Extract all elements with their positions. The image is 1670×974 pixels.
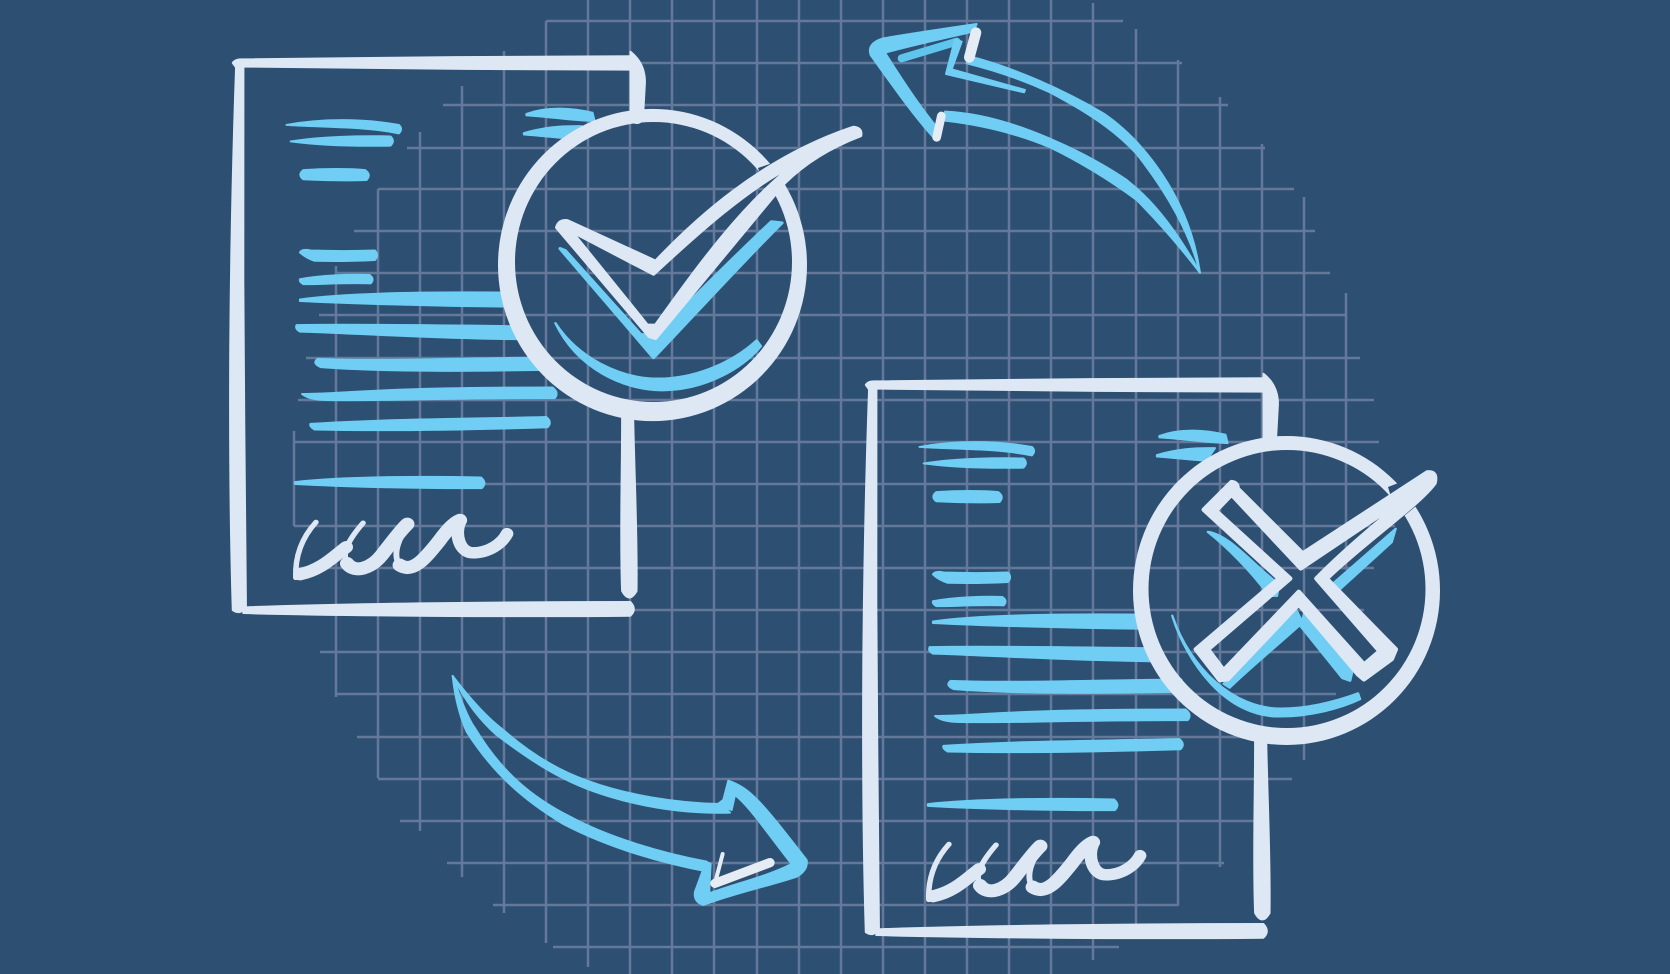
magnifier ring with cross: [1133, 436, 1440, 745]
document with approval check: [230, 51, 861, 616]
blue cross shadow: [1172, 529, 1396, 716]
check mark: [555, 127, 861, 390]
arrow from first document to second: [453, 676, 807, 905]
arrow head: [695, 781, 807, 905]
white cross outline: [1196, 472, 1435, 680]
magnifier ring with check: [498, 109, 861, 421]
ring gap behind cross: [1388, 474, 1422, 521]
arrow head: [870, 24, 977, 140]
document 1 text lines: [287, 109, 595, 488]
arrow tail lower: [945, 112, 1200, 273]
arrow tail upper: [453, 676, 730, 813]
white arrow caps: [969, 33, 976, 57]
ring gap behind check: [758, 158, 787, 200]
arrow inner strokes: [902, 42, 957, 58]
document 1 outline: [230, 51, 645, 616]
arrow tail lower: [453, 676, 708, 872]
white arrow accent: [715, 863, 770, 883]
white check ribbon: [557, 127, 861, 339]
document 2 text lines: [920, 431, 1228, 810]
blue smile stroke: [555, 323, 761, 390]
cross mark: [1172, 472, 1435, 716]
background grid: [294, 0, 1395, 974]
blue check shadow: [560, 222, 782, 358]
document with rejection cross: [863, 373, 1440, 938]
magnifier ring 2: [1133, 436, 1440, 745]
document 2 outline: [863, 373, 1278, 938]
magnifier ring 1: [498, 109, 807, 421]
document 1 signature: [296, 520, 507, 578]
document 2 signature: [929, 842, 1140, 900]
arrow tail upper: [967, 56, 1200, 273]
arrow from second document back to first: [870, 24, 1200, 273]
